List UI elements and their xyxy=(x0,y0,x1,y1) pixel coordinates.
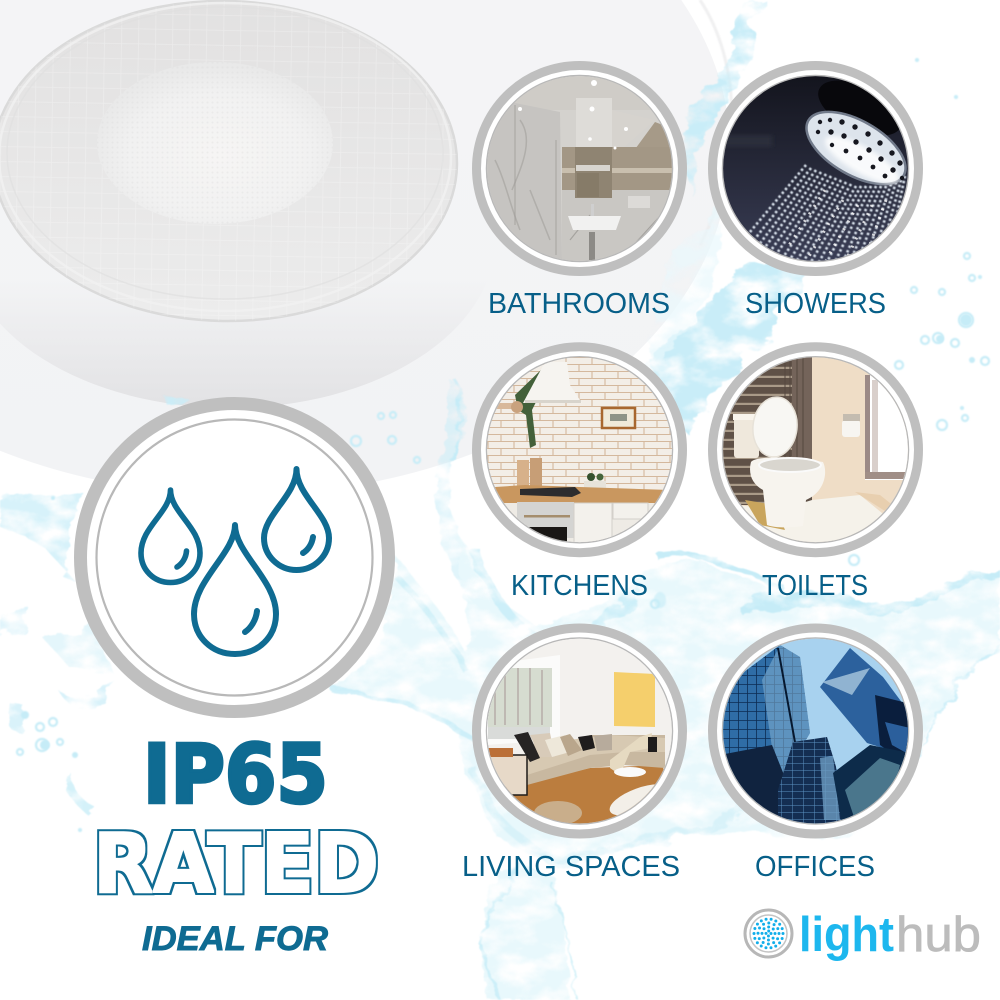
panel: IP65 icon circle xyxy=(80,404,388,712)
photo: shower head xyxy=(723,76,908,261)
panel: showers xyxy=(712,66,918,272)
panel: toilets xyxy=(712,347,918,553)
panel: living spaces xyxy=(476,628,682,834)
light fixture lens xyxy=(0,0,460,325)
photo: kitchen xyxy=(485,355,675,551)
label: offices: OFFICES xyxy=(755,851,875,883)
photo: living room xyxy=(485,635,675,830)
logo: lighthub: light xyxy=(799,908,894,962)
grey backdrop with light fixture shadow xyxy=(0,0,732,495)
heading: RATED outlined: RATED xyxy=(93,817,379,912)
icon: water drops xyxy=(141,469,329,654)
logo: lighthub xyxy=(745,908,981,962)
heading: IP65: IP65 xyxy=(143,728,328,822)
panel: kitchens xyxy=(476,347,682,553)
subheading: ideal for: IDEAL FOR xyxy=(142,920,328,958)
label: showers: SHOWERS xyxy=(745,288,886,320)
photo: office towers xyxy=(720,635,915,830)
label: bathrooms: BATHROOMS xyxy=(488,288,670,320)
label: living spaces: LIVING SPACES xyxy=(462,851,680,883)
panel: bathrooms xyxy=(476,66,682,272)
label: toilets: TOILETS xyxy=(762,570,868,602)
icon: logo ring xyxy=(745,910,792,957)
photo: bathroom xyxy=(485,75,675,265)
panel: offices xyxy=(712,628,918,834)
logo: lighthub: hub xyxy=(896,908,981,962)
photo: toilet xyxy=(720,355,915,550)
label: kitchens: KITCHENS xyxy=(511,570,648,602)
